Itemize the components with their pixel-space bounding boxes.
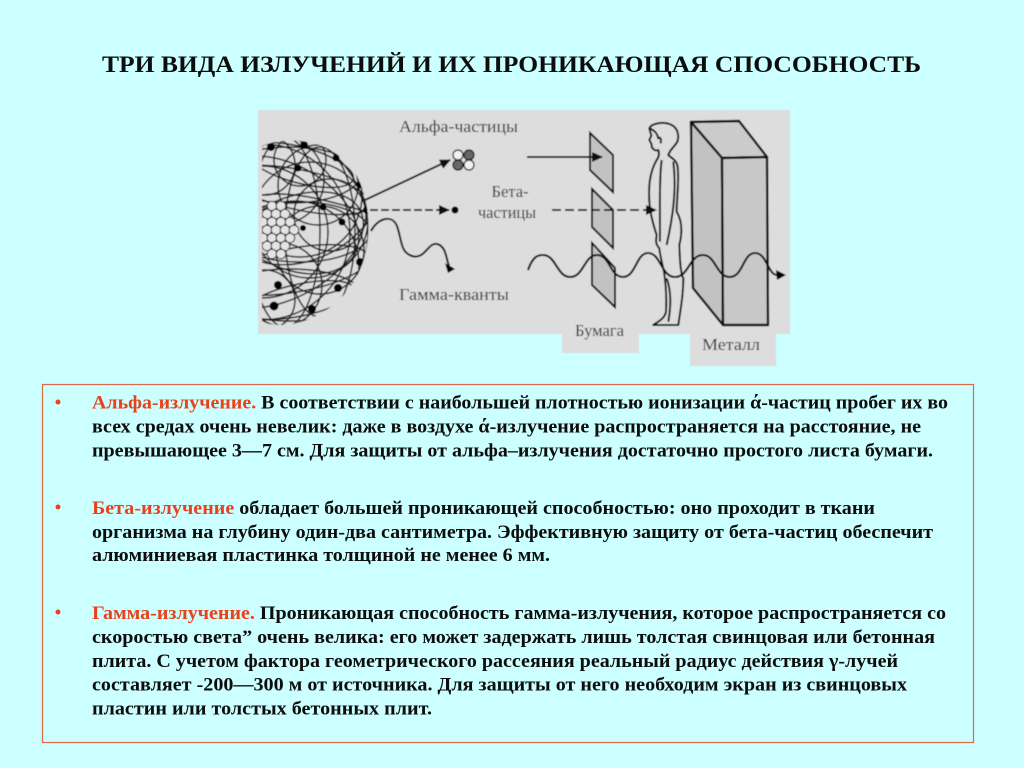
label: beta particles: Бета- [491,182,529,201]
orbits [262,140,369,326]
block front face [722,157,768,325]
metal block [691,121,768,325]
arrow: gamma wave through paper, body and metal [528,253,777,277]
icon: atom with nucleus and orbits [262,140,369,326]
text block: gamma radiation: плита. С учетом фактора геометрического рассеяния реальный радиус действия γ-лучей [92,651,898,672]
person silhouette [649,123,683,325]
label: paper: Бумага [575,321,625,340]
icon: gamma arrowhead [445,263,455,273]
sheet 1 [590,133,613,192]
label box: metal [690,330,776,366]
nucleus cluster [258,201,299,259]
electrons [267,141,371,313]
icon: beta particle [452,206,458,214]
text block: beta radiation: алюминиевая пластинка толщиной не менее 6 мм. [92,545,550,566]
bullet: beta [56,504,60,510]
arrow: alpha from source [365,160,450,200]
text block: beta radiation: Бета-излучение обладает большей проникающей способностью: оно проходит в ткани [92,498,875,519]
text block: gamma radiation [92,603,946,720]
label: beta particles second line: частицы [478,203,536,222]
text block: alpha radiation: Альфа-излучение. В соответствии с наибольшей плотностью ионизации ά-частиц пробег их во [92,392,948,414]
text block: beta radiation [92,498,934,566]
bullet: alpha [56,400,60,404]
arrow: beta stopped by body [552,209,656,211]
bullet: gamma [56,610,60,614]
arrow: gamma from source [371,219,449,266]
diagram background [258,110,790,334]
label: alpha particles: Альфа-частицы [399,117,518,136]
block top [691,121,767,158]
text block: gamma radiation: Гамма-излучение. Проникающая способность гамма-излучения, которое распространяется со [92,603,946,624]
panel border [42,384,974,742]
icon: alpha particle [453,150,474,170]
title: ТРИ ВИДА ИЗЛУЧЕНИЙ И ИХ ПРОНИКАЮЩАЯ СПОСОБНОСТЬ [102,52,921,78]
text block: gamma radiation: скоростью света” очень велика: его может задержать лишь толстая свинцовая или бетонная [92,627,935,648]
icon: gamma wave arrowhead [776,270,786,280]
text block: beta radiation: организма на глубину один-два сантиметра. Эффективную защиту от бета-частиц обеспечит [92,522,934,543]
block left face [691,122,723,325]
panel: radiation descriptions [42,384,974,742]
paper sheets [590,133,615,307]
text block: alpha radiation [92,392,948,462]
label: gamma quanta: Гамма-кванты [399,285,509,304]
text block: alpha radiation: всех средах очень невелик: даже в воздухе ά-излучение распространяется на расстояние, не [92,416,921,438]
label: metal: Металл [702,335,760,354]
sheet 2 [592,189,613,248]
text block: gamma radiation: составляет -200—300 м от источника. Для защиты от него необходим экран из свинцовых [92,674,908,696]
label box: paper [562,330,639,353]
arrow: beta from source [370,209,449,211]
text block: gamma radiation: пластин или толстых бетонных плит. [92,698,432,720]
diagram: penetrating power of radiation [258,110,790,366]
arrow: alpha stopped by paper [527,156,602,158]
text block: alpha radiation: превышающее 3—7 см. Для защиты от альфа–излучения достаточно простого листа бумаги. [92,440,933,462]
sheet 3 [592,243,615,307]
